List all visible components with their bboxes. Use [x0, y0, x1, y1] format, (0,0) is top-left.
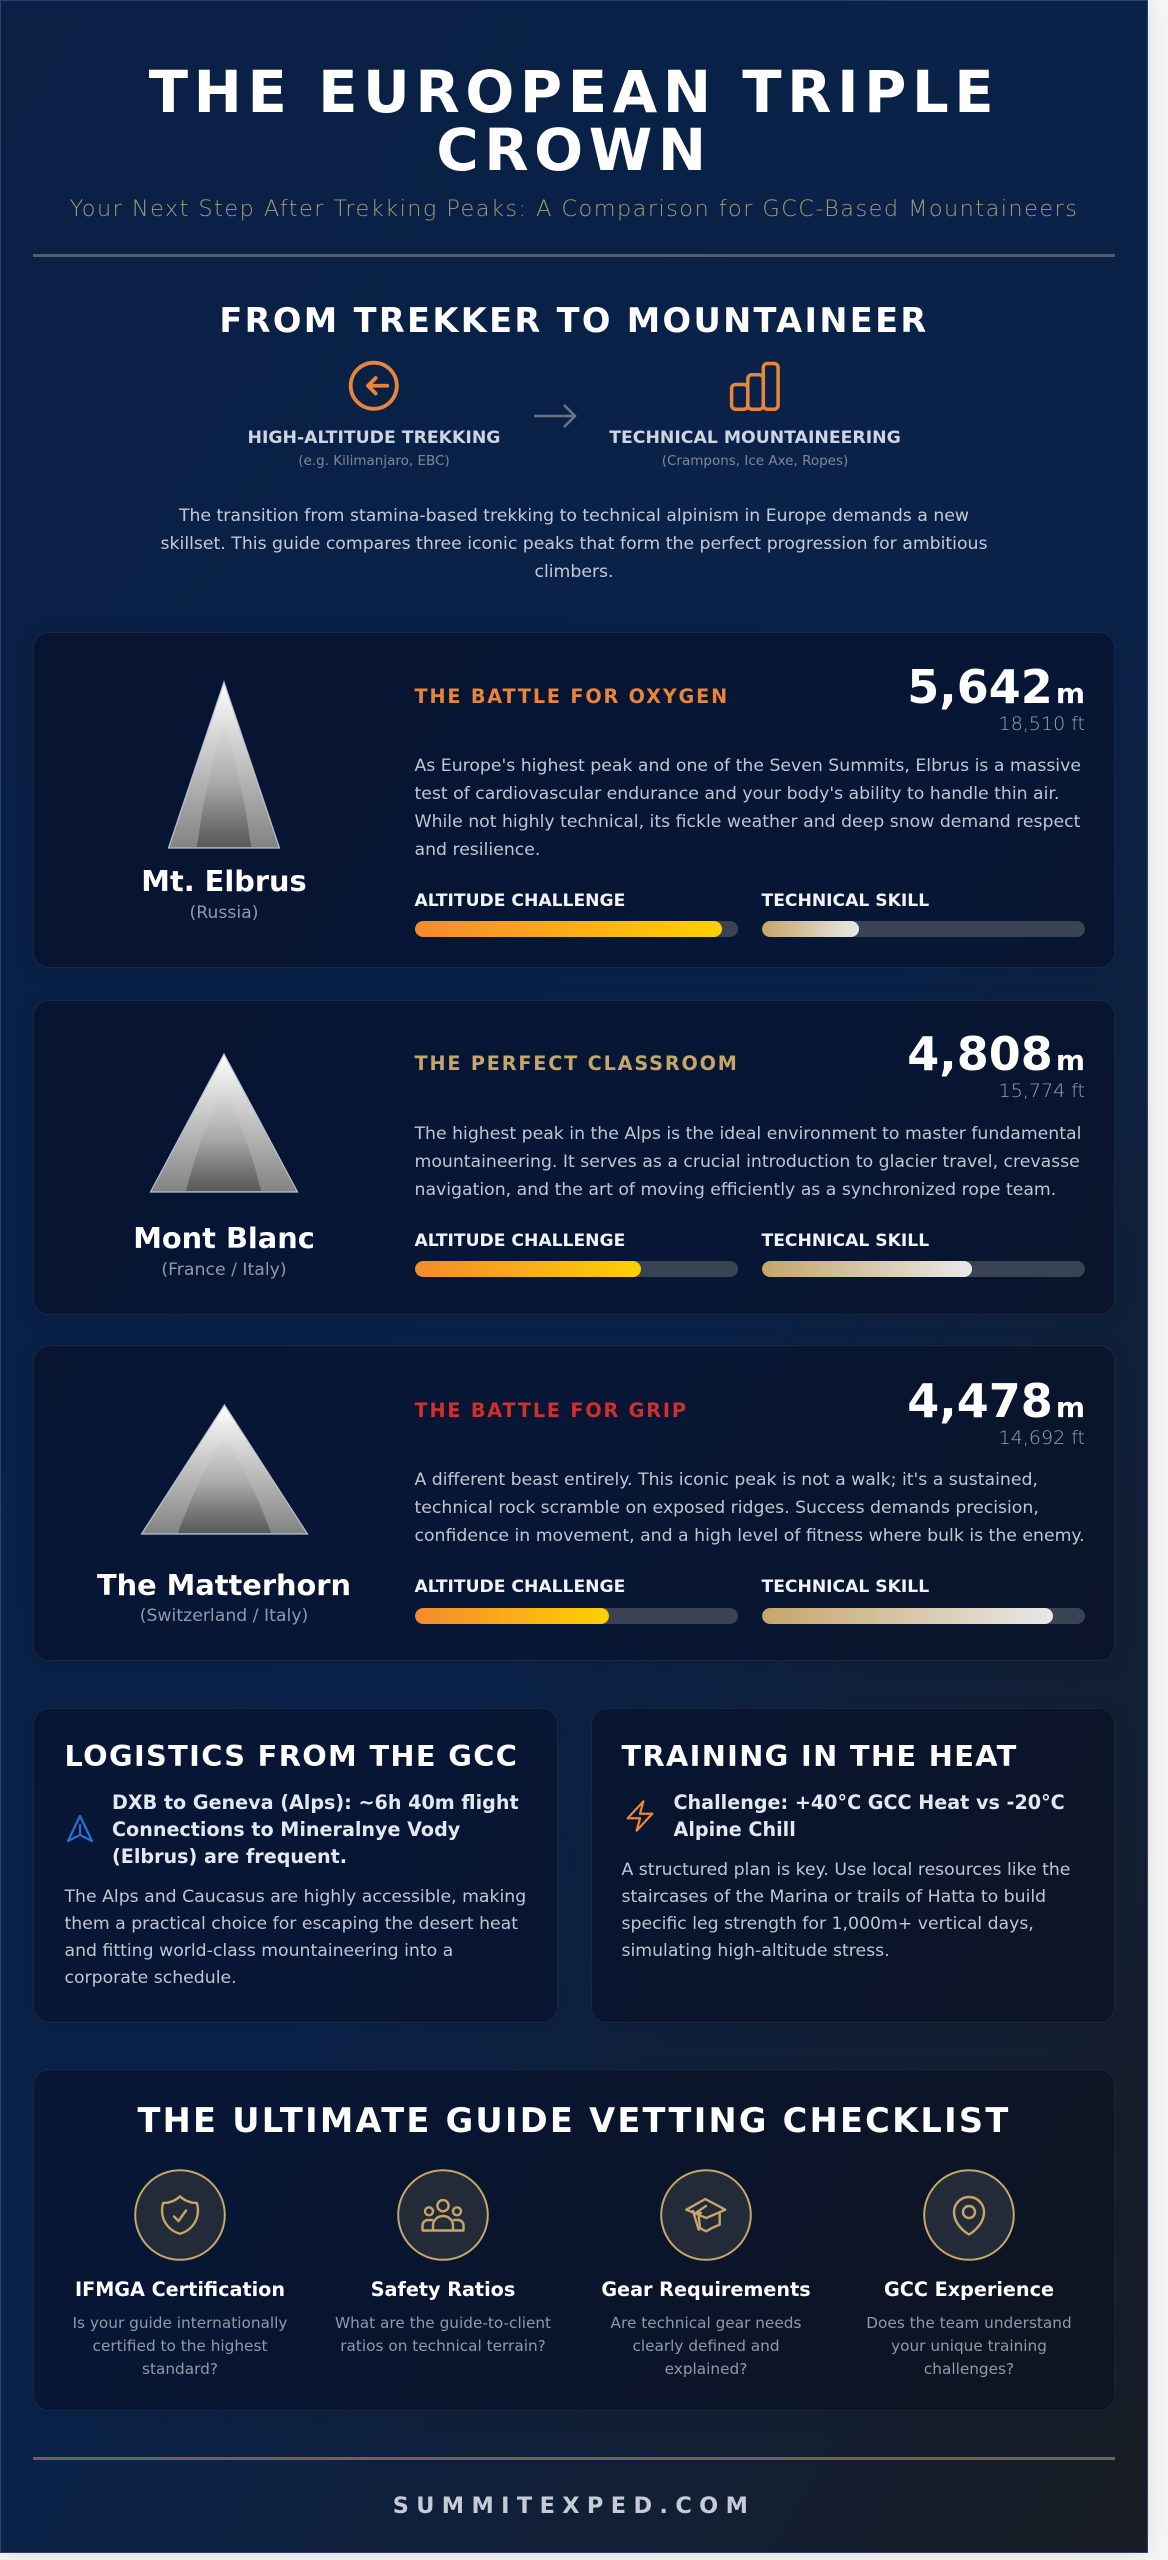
checklist item: experience [866, 2169, 1072, 2378]
item title: IFMGA Certification [75, 2278, 285, 2300]
altitude metres: 4,478m [907, 1374, 1085, 1428]
item text [866, 2314, 1072, 2378]
item text: ratios on technical terrain? [340, 2337, 546, 2355]
challenge facts [674, 1790, 1065, 1840]
item text: challenges? [924, 2360, 1014, 2378]
description: While not highly technical, its fickle weather and deep snow demand respect [414, 812, 1080, 832]
paragraph: A structured plan is key. Use local resources like the [622, 1860, 1070, 1880]
altitude label: ALTITUDE CHALLENGE [414, 890, 625, 910]
technical bar [762, 1608, 1085, 1624]
item text: standard? [142, 2360, 218, 2378]
item text: explained? [665, 2360, 747, 2378]
description: A different beast entirely. This iconic peak is not a walk; it's a sustained, [414, 1470, 1038, 1490]
checklist item: IFMGA [73, 2169, 287, 2378]
mountaineering label: TECHNICAL MOUNTAINEERING [609, 428, 901, 448]
heading: TRAINING IN THE HEAT [622, 1739, 1018, 1773]
trekking label: HIGH-ALTITUDE TREKKING [248, 428, 500, 448]
panel: training [591, 1708, 1115, 2023]
altitude bar [414, 1608, 738, 1624]
flight facts: (Elbrus) are frequent. [112, 1844, 347, 1868]
altitude feet: 14,692 ft [999, 1427, 1085, 1449]
description: test of cardiovascular endurance and your body's ability to handle thin air. [414, 784, 1059, 804]
icon: graduation cap [660, 2169, 752, 2261]
intro text: The transition from stamina-based trekking to technical alpinism in Europe demands a new [179, 506, 969, 526]
flight facts: Connections to Mineralnye Vody [112, 1818, 460, 1840]
icon: lightning bolt [626, 1800, 654, 1832]
trekking examples: (e.g. Kilimanjaro, EBC) [298, 453, 450, 469]
altitude bar [414, 1261, 738, 1277]
transition diagram [248, 360, 901, 469]
icon: map pin [923, 2169, 1015, 2261]
title: CROWN [436, 116, 712, 184]
peak name: Mont Blanc [133, 1221, 315, 1255]
heading: from trekker to mountaineer: FROM TREKKER TO MOUNTAINEER [219, 301, 929, 340]
paragraph: specific leg strength for 1,000m+ vertical days, [622, 1914, 1034, 1934]
tagline: THE BATTLE FOR OXYGEN [414, 685, 729, 708]
description: As Europe's highest peak and one of the Seven Summits, Elbrus is a massive [414, 756, 1081, 776]
description: and resilience. [414, 840, 540, 860]
technical label: TECHNICAL SKILL [762, 1230, 929, 1250]
icon: Matterhorn mountain [140, 1404, 308, 1535]
panel: logistics [33, 1708, 558, 2023]
arrow [534, 404, 577, 428]
altitude label: ALTITUDE CHALLENGE [414, 1230, 625, 1250]
footer brand: SUMMITEXPED.COM [393, 2492, 755, 2518]
icon: bar chart [730, 362, 780, 411]
paragraph: them a practical choice for escaping the desert heat [64, 1914, 518, 1934]
title [149, 59, 999, 184]
altitude metres: 4,808m [907, 1027, 1085, 1081]
peak country: (Russia) [189, 903, 259, 923]
item text: clearly defined and [632, 2337, 780, 2355]
peak name: Mt. Elbrus [141, 864, 307, 898]
icon: trekking arrow circle [348, 360, 399, 411]
description: technical rock scramble on exposed ridges. Success demands precision, [414, 1498, 1039, 1518]
altitude label: ALTITUDE CHALLENGE [414, 1576, 625, 1596]
title: THE EUROPEAN TRIPLE [149, 59, 999, 126]
checklist item: gear [601, 2169, 811, 2378]
item text: your unique training [891, 2337, 1047, 2355]
icon: paper plane [66, 1814, 94, 1842]
paragraph: simulating high-altitude stress. [622, 1941, 890, 1961]
description: navigation, and the art of moving efficiently as a synchronized rope team. [414, 1180, 1056, 1200]
technical label: TECHNICAL SKILL [762, 890, 929, 910]
item title: Gear Requirements [601, 2278, 811, 2300]
technical label: TECHNICAL SKILL [762, 1576, 929, 1596]
peak country: (France / Italy) [161, 1260, 287, 1280]
panel: Mont Blanc [33, 1000, 1115, 1315]
heading: LOGISTICS FROM THE GCC [64, 1739, 518, 1773]
description: confidence in movement, and a high level of fitness where bulk is the enemy. [414, 1526, 1085, 1546]
challenge facts: Challenge: +40°C GCC Heat vs -20°C [674, 1790, 1065, 1814]
description: mountaineering. It serves as a crucial introduction to glacier travel, crevasse [414, 1152, 1080, 1172]
icon: shield [134, 2169, 226, 2261]
description: The highest peak in the Alps is the ideal environment to master fundamental [414, 1124, 1081, 1144]
panel: Mt. Elbrus [33, 632, 1115, 968]
icon: group [397, 2169, 489, 2261]
altitude feet: 15,774 ft [999, 1080, 1085, 1102]
panel: checklist [33, 2069, 1115, 2411]
paragraph [622, 1860, 1070, 1961]
item text: What are the guide-to-client [335, 2314, 551, 2332]
item text [73, 2314, 287, 2378]
tagline: THE PERFECT CLASSROOM [414, 1052, 739, 1075]
paragraph: corporate schedule. [64, 1968, 237, 1988]
paragraph: and fitting world-class mountaineering into a [64, 1941, 453, 1961]
checklist item: safety [335, 2169, 551, 2355]
technical bar [762, 921, 1085, 937]
technical bar [762, 1261, 1085, 1277]
subtitle: Your Next Step After Trekking Peaks: A Comparison for GCC-Based Mountaineers [70, 196, 1078, 222]
intro text [161, 506, 987, 582]
item text: certified to the highest [93, 2337, 267, 2355]
intro text: skillset. This guide compares three iconic peaks that form the perfect progression for ambitious [161, 534, 987, 554]
item text [335, 2314, 551, 2355]
heading: THE ULTIMATE GUIDE VETTING CHECKLIST [137, 2101, 1011, 2140]
mountaineering examples: (Crampons, Ice Axe, Ropes) [662, 453, 848, 469]
challenge facts: Alpine Chill [674, 1818, 796, 1840]
item text: Does the team understand [866, 2314, 1072, 2332]
item text: Is your guide internationally [73, 2314, 287, 2332]
flight facts [112, 1790, 519, 1868]
description [414, 1124, 1081, 1200]
peak country: (Switzerland / Italy) [140, 1606, 308, 1626]
item title: GCC Experience [884, 2278, 1054, 2300]
altitude bar [414, 921, 738, 937]
item text: Are technical gear needs [611, 2314, 801, 2332]
panel: The Matterhorn [33, 1345, 1115, 1661]
flight facts: DXB to Geneva (Alps): ~6h 40m flight [112, 1790, 519, 1814]
peak name: The Matterhorn [97, 1568, 351, 1602]
description [414, 1470, 1085, 1546]
item text [610, 2314, 801, 2378]
paragraph [64, 1887, 526, 1988]
icon: Elbrus mountain [168, 680, 280, 849]
item title: Safety Ratios [371, 2278, 515, 2300]
description [414, 756, 1081, 860]
icon: Mont Blanc mountain [150, 1052, 298, 1193]
intro text: climbers. [534, 562, 614, 582]
altitude feet: 18,510 ft [999, 712, 1085, 734]
tagline: THE BATTLE FOR GRIP [414, 1398, 688, 1422]
paragraph: staircases of the Marina or trails of Hatta to build [622, 1887, 1046, 1907]
paragraph: The Alps and Caucasus are highly accessible, making [64, 1887, 526, 1907]
altitude metres: 5,642m [907, 660, 1085, 714]
